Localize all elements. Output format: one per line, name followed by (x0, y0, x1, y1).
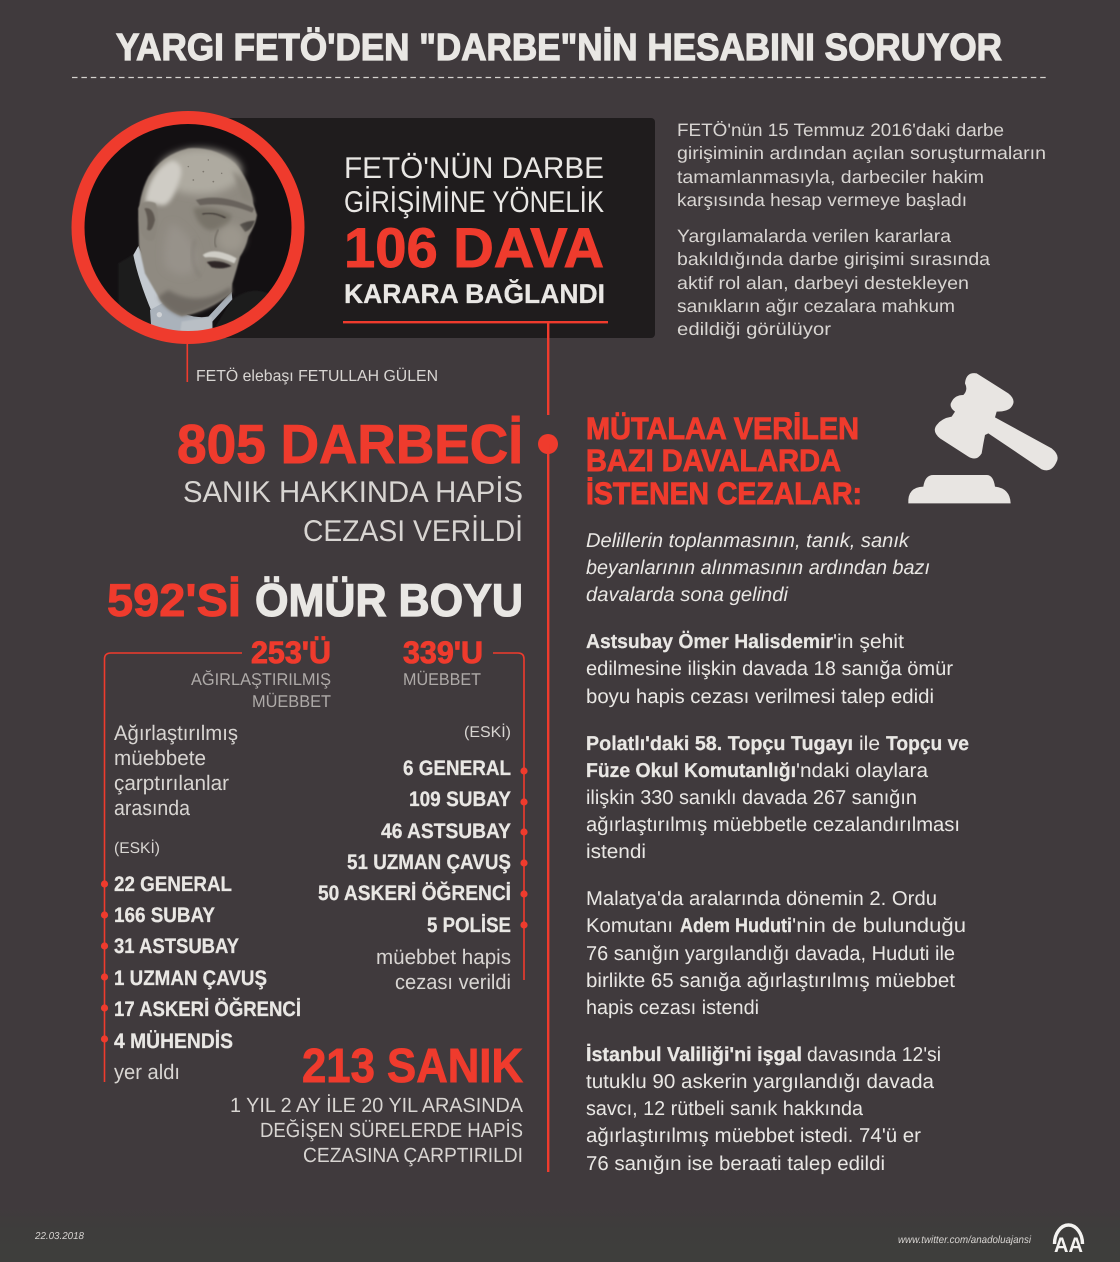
stat: 805 darbeci: CEZASI VERİLDİ (303, 514, 523, 548)
text block: İstanbul Valiliği case: 76 sanığın ise beraati talep edildi (586, 1153, 885, 1175)
list: aggravated ranks: 17 ASKERİ ÖĞRENCİ (114, 997, 301, 1021)
list: aggravated ranks: 166 SUBAY (114, 904, 215, 927)
text block: Polatlı case: Füze Okul Komutanlığı (586, 760, 796, 782)
heading: requested sentences: İSTENEN CEZALAR: (586, 476, 862, 511)
list: life ranks: 51 UZMAN ÇAVUŞ (347, 851, 511, 874)
list: aggravated ranks: 1 UZMAN ÇAVUŞ (114, 967, 267, 990)
text block: intro: FETÖ'nün 15 Temmuz 2016'daki darbe (677, 120, 1004, 140)
list: life ranks: 46 ASTSUBAY (381, 820, 511, 843)
heading: case count: 106 DAVA (344, 216, 604, 279)
text block: Polatlı case: ilişkin 330 sanıklı davada 267 sanığın (586, 787, 917, 809)
stat: 213 sanık (230, 1040, 523, 1167)
list: life ranks: 6 GENERAL (403, 757, 511, 780)
list: life ranks (318, 723, 528, 994)
footer: social link: www.twitter.com/anadoluajansi (898, 1234, 1032, 1246)
stat: 592 ömür boyu (107, 574, 523, 626)
text block: intro: edildiği görülüyor (677, 319, 831, 339)
text block: intro (677, 120, 1046, 339)
text block: intro: girişiminin ardından açılan soruşturmaların (677, 143, 1046, 163)
icon: AA logo: AA (1054, 1234, 1083, 1257)
text block: Halisdemir case: boyu hapis cezası verilmesi talep edidi (586, 686, 934, 708)
text block: İstanbul Valiliği case: tutuklu 90 askerin yargılandığı davada (586, 1071, 935, 1093)
text block: intro: sanıkların ağır cezalara mahkum (677, 296, 955, 316)
text block: Halisdemir case: Astsubay Ömer Halisdemir (586, 630, 833, 653)
text: aggravated intro: (ESKİ) (114, 839, 160, 857)
stat: 213 sanık: CEZASINA ÇARPTIRILDI (303, 1144, 523, 1167)
heading: 253: 253'Ü (251, 635, 331, 670)
text block: intro: bakıldığında darbe girişimi sırasında (677, 249, 991, 269)
stat: 213 sanık: 1 YIL 2 AY İLE 20 YIL ARASINDA (230, 1094, 523, 1117)
text block: Malatya case (586, 888, 966, 1019)
panel: life sentences (318, 635, 528, 994)
timeline spine (538, 322, 558, 1172)
panel: headline box (190, 118, 655, 338)
icon: gavel (908, 373, 1058, 503)
list: aggravated ranks (101, 873, 301, 1084)
stat: 805 darbeci: SANIK HAKKINDA HAPİS (183, 475, 523, 509)
list: aggravated ranks: yer aldı (114, 1061, 180, 1084)
text block: Polatlı case: 'ndaki olaylara (796, 760, 929, 782)
text block: Halisdemir case (586, 630, 953, 708)
text: aggravated intro (114, 722, 238, 857)
list: aggravated ranks: 31 ASTSUBAY (114, 935, 239, 958)
text block: Malatya case: 'nin de bulunduğu (792, 915, 966, 937)
list: life ranks: 5 POLİSE (427, 914, 511, 937)
portrait: Fetullah Gülen in red ring (78, 118, 298, 338)
heading: case count: KARARA BAĞLANDI (344, 279, 605, 309)
stat: 805 darbeci: 805 DARBECİ (177, 413, 523, 475)
panel: aggravated life sentences (101, 635, 331, 1084)
text block: Malatya case: hapis cezası istendi (586, 997, 759, 1019)
stat: 592 ömür boyu: ÖMÜR BOYU (255, 574, 523, 626)
text: aggravated intro: arasında (114, 797, 190, 820)
text block: Malatya case: birlikte 65 sanığa ağırlaştırılmış müebbet (586, 970, 955, 992)
heading: case count: GİRİŞİMİNE YÖNELİK (344, 185, 604, 219)
list: life ranks: cezası verildi (395, 971, 511, 994)
text block: italic lead (586, 530, 930, 606)
text block: intro: tamamlanmasıyla, darbeciler hakim (677, 167, 984, 187)
text: aggravated intro: müebbete (114, 747, 206, 770)
caption: portrait name: FETÖ elebaşı FETULLAH GÜLEN (196, 367, 438, 385)
heading: requested sentences: BAZI DAVALARDA (586, 443, 841, 478)
heading: 253: MÜEBBET (252, 692, 331, 711)
text block: Polatlı case: ile (859, 733, 880, 755)
stat: 213 sanık: 213 SANIK (302, 1040, 523, 1093)
text block: İstanbul Valiliği case: savcı, 12 rütbeli sanık hakkında (586, 1098, 864, 1120)
heading: 253: AĞIRLAŞTIRILMIŞ (191, 670, 331, 689)
list: life ranks: 109 SUBAY (409, 788, 511, 811)
title: YARGI FETÖ'DEN "DARBE"NİN HESABINI SORUYOR (116, 27, 1002, 69)
footer: date: 22.03.2018 (34, 1231, 84, 1242)
text block: Malatya case: Malatya'da aralarında dönemin 2. Ordu (586, 888, 937, 910)
heading: 253 (191, 635, 331, 711)
text block: italic lead: davalarda sona gelindi (586, 584, 789, 606)
text block: intro: karşısında hesap vermeye başladı (677, 190, 967, 210)
heading: 339: 339'U (403, 635, 483, 670)
list: life ranks: müebbet hapis (376, 946, 511, 969)
list: life ranks: 50 ASKERİ ÖĞRENCİ (318, 881, 511, 905)
text block: İstanbul Valiliği case: davasında 12'si (807, 1044, 941, 1066)
text block: Polatlı case: Topçu ve (886, 733, 969, 755)
text block: İstanbul Valiliği case: İstanbul Valiliği'ni işgal (586, 1043, 802, 1066)
list: life ranks: (ESKİ) (464, 723, 511, 741)
text block: Polatlı case: istendi (586, 841, 646, 863)
text: aggravated intro: çarptırılanlar (114, 772, 229, 795)
icon: AA logo (1054, 1225, 1083, 1257)
text block: Halisdemir case: edilmesine ilişkin davada 18 sanığa ömür (586, 658, 953, 680)
list: aggravated ranks: 22 GENERAL (114, 873, 232, 896)
heading: 339: MÜEBBET (403, 670, 481, 689)
text block: intro: Yargılamalarda verilen kararlara (677, 226, 952, 246)
text block: Polatlı case: ağırlaştırılmış müebbetle cezalandırılması (586, 814, 960, 836)
stat: 592 ömür boyu: 592'Sİ (107, 574, 241, 626)
text block: Malatya case: Komutanı (586, 915, 673, 937)
heading: requested sentences (586, 411, 862, 511)
heading: case count (344, 152, 605, 309)
text block: Malatya case: Adem Huduti (680, 915, 792, 937)
stat: 805 darbeci (177, 413, 523, 548)
stat: 213 sanık: DEĞİŞEN SÜRELERDE HAPİS (260, 1119, 523, 1142)
text block: italic lead: Delillerin toplanmasının, tanık, sanık (586, 530, 910, 552)
text block: Halisdemir case: 'in şehit (833, 631, 904, 653)
heading: case count: FETÖ'NÜN DARBE (344, 152, 604, 185)
list: aggravated ranks: 4 MÜHENDİS (114, 1030, 233, 1053)
text block: İstanbul Valiliği case (586, 1043, 941, 1175)
heading: 339 (403, 635, 483, 689)
text: aggravated intro: Ağırlaştırılmış (114, 722, 238, 745)
text block: Polatlı case: Polatlı'daki 58. Topçu Tugayı (586, 733, 853, 755)
text block: Polatlı case (586, 733, 969, 863)
heading: requested sentences: MÜTALAA VERİLEN (586, 411, 859, 446)
text block: İstanbul Valiliği case: ağırlaştırılmış müebbet istedi. 74'ü er (586, 1125, 921, 1147)
text block: intro: aktif rol alan, darbeyi destekleyen (677, 273, 969, 293)
text block: italic lead: beyanlarının alınmasının ardından bazı (586, 557, 930, 579)
text block: Malatya case: 76 sanığın yargılandığı davada, Huduti ile (586, 943, 955, 965)
